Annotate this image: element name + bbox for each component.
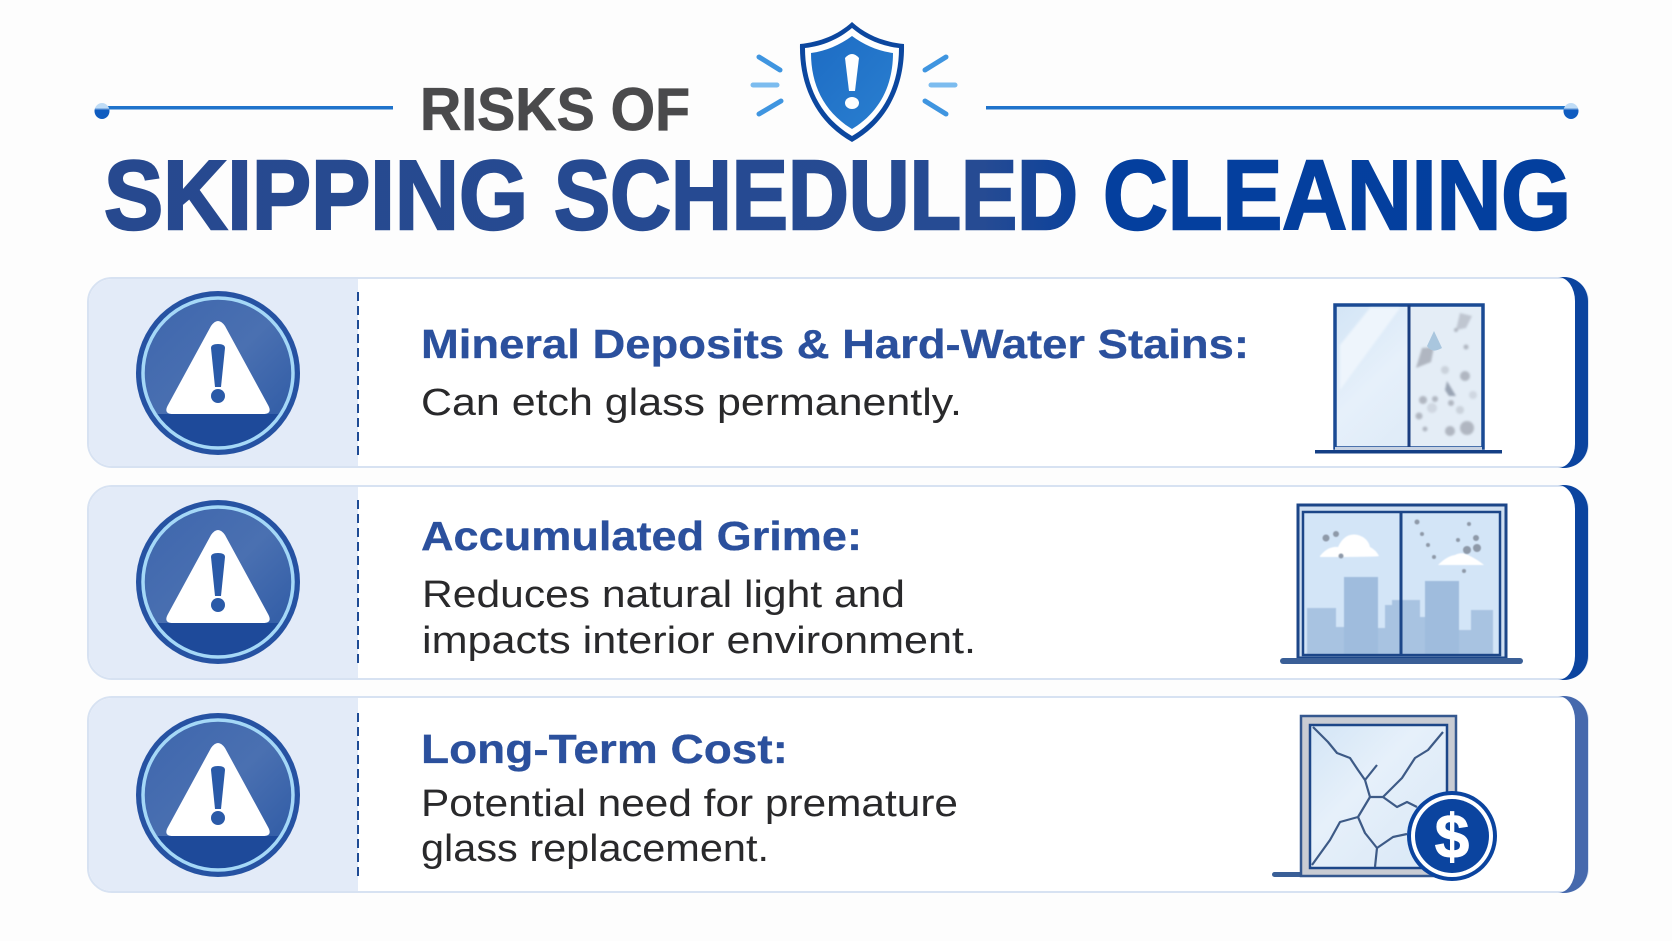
title: SKIPPING: [104, 140, 528, 250]
icon: warning: [136, 713, 300, 877]
panel: mineral deposits: [88, 277, 1588, 468]
heading: Accumulated Grime:: [421, 513, 862, 559]
header rule left: [94, 103, 393, 119]
icon: warning shield with rays: [753, 22, 955, 142]
title: [104, 140, 1571, 250]
panel: long-term cost: [88, 696, 1588, 893]
icon: stained window: [1315, 305, 1502, 454]
text: Can etch glass permanently.: [421, 382, 962, 424]
icon: warning: [136, 291, 300, 455]
text: Potential need for premature: [421, 783, 958, 825]
heading: Long-Term Cost:: [421, 726, 788, 772]
icon: cracked window with dollar coin: [1272, 716, 1497, 881]
card background: [88, 485, 1588, 680]
icon: cracked window with dollar coin: $: [1435, 803, 1469, 872]
title: SCHEDULED: [554, 140, 1078, 250]
card background: [88, 696, 1588, 893]
text: Reduces natural light and: [422, 574, 905, 616]
text: impacts interior environment.: [422, 620, 976, 662]
panel: accumulated grime: [88, 485, 1588, 680]
icon: grimy window with skyline: [1280, 505, 1523, 664]
title: CLEANING: [1103, 140, 1571, 250]
heading: risks of: RISKS OF: [420, 76, 690, 143]
card background: [88, 277, 1588, 468]
icon: warning: [136, 500, 300, 664]
header rule right: [986, 103, 1578, 119]
heading: Mineral Deposits & Hard-Water Stains:: [421, 321, 1249, 367]
text: glass replacement.: [421, 828, 769, 870]
